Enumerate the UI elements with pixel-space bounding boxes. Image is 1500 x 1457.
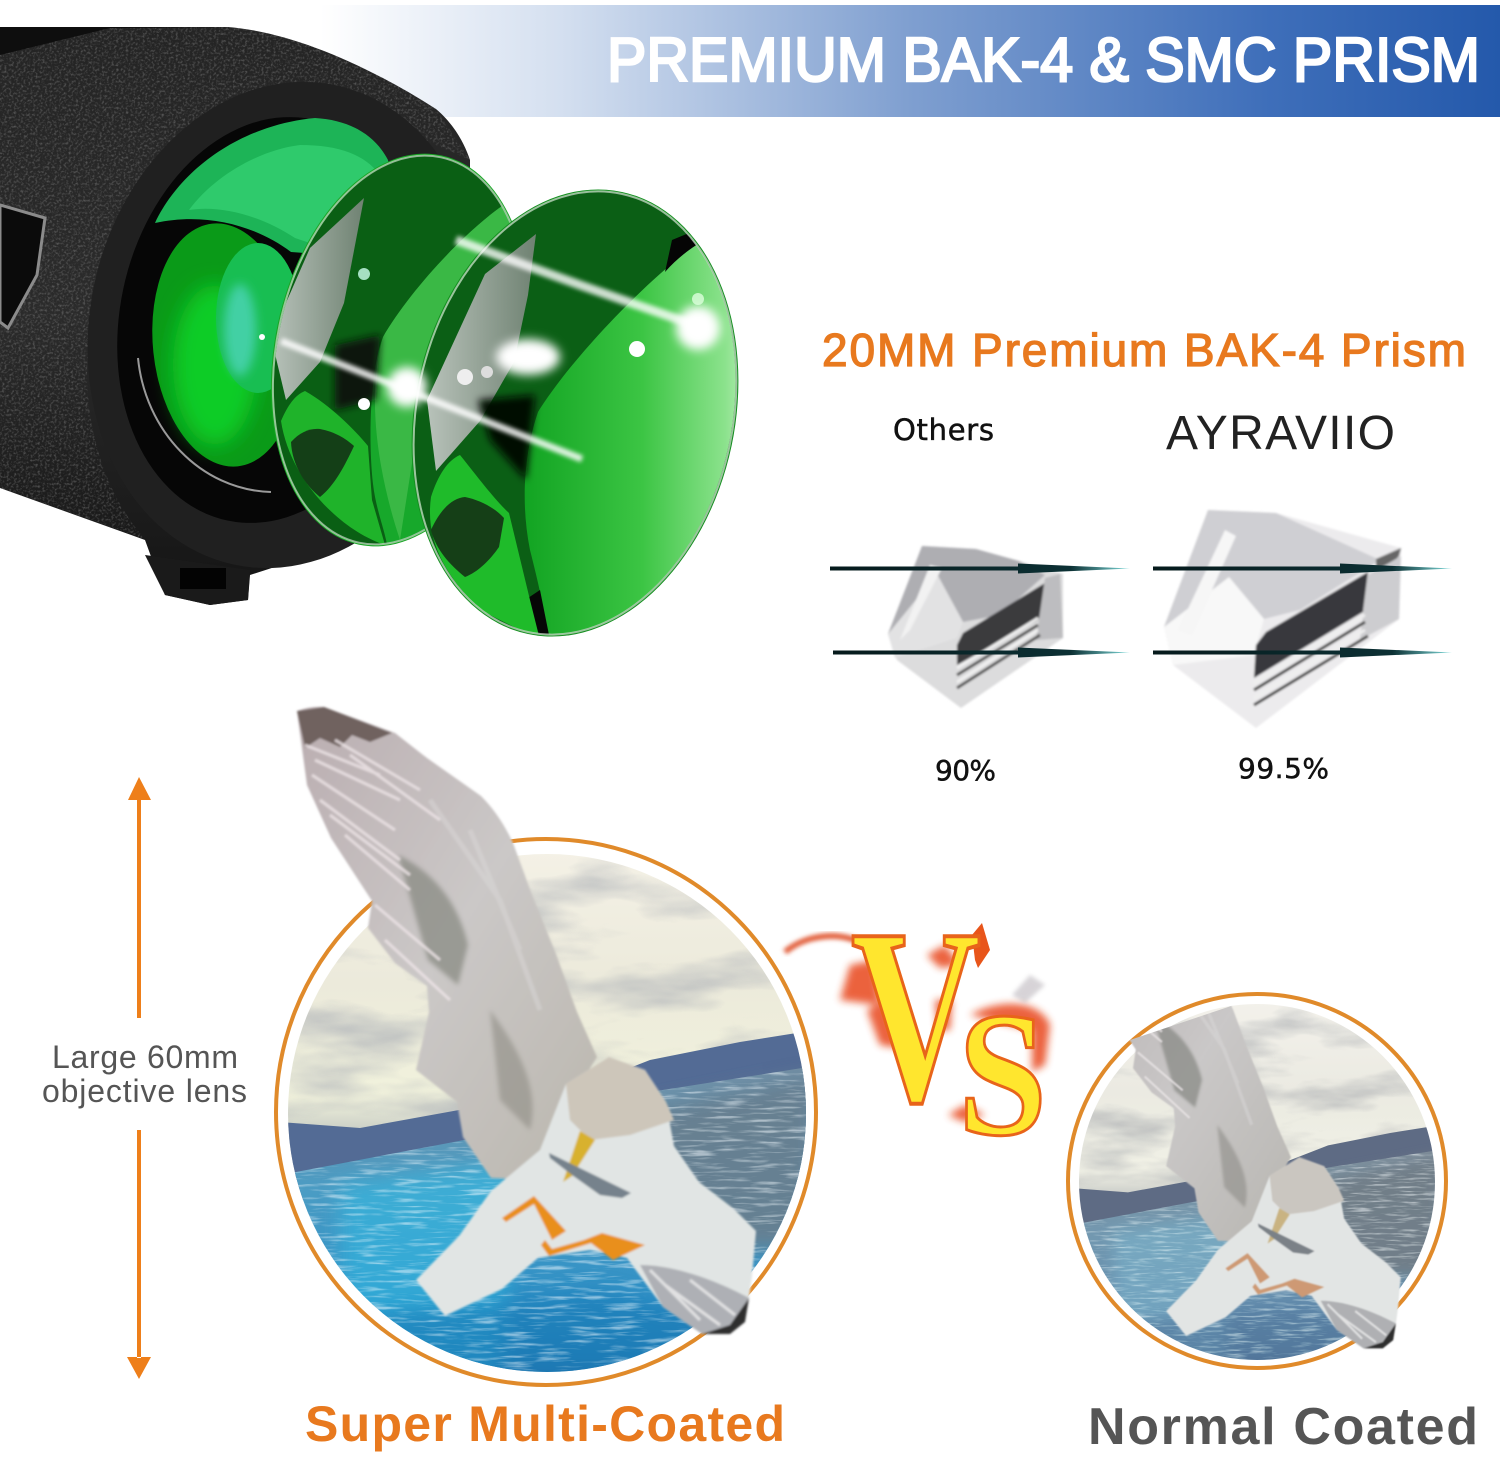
lens light flares bbox=[259, 240, 720, 459]
monocular body with front lens housing bbox=[0, 27, 470, 605]
circle: super multi-coated view bbox=[276, 707, 820, 1385]
dimension label: Large 60mm bbox=[52, 1039, 238, 1075]
prism heading: 20MM Premium BAK-4 Prism bbox=[822, 324, 1466, 376]
rear green lens bbox=[271, 154, 512, 546]
title: PREMIUM BAK-4 & SMC PRISM bbox=[607, 26, 1480, 95]
VS fire emblem: V bbox=[851, 878, 981, 1155]
mount tab bbox=[145, 555, 250, 605]
prism: AYRAVIIO bbox=[1164, 510, 1401, 728]
label: others: Others bbox=[893, 413, 994, 447]
caption: super multi-coated: Super Multi-Coated bbox=[305, 1396, 785, 1452]
VS fire emblem: S bbox=[958, 975, 1047, 1173]
seagull sharp bbox=[297, 707, 756, 1334]
shield badge bbox=[0, 205, 45, 328]
dimension label: objective lens bbox=[42, 1073, 247, 1109]
prism: others bbox=[888, 546, 1063, 708]
seagull muted bbox=[1129, 1006, 1402, 1350]
label: AYRAVIIO: AYRAVIIO bbox=[1166, 407, 1395, 460]
caption: normal coated: Normal Coated bbox=[1088, 1398, 1478, 1456]
front green lens bbox=[412, 190, 738, 636]
label: 90%: 90% bbox=[935, 754, 996, 787]
circle: normal coated view bbox=[1066, 992, 1448, 1370]
light ray arrows bbox=[830, 564, 1452, 658]
VS fire emblem bbox=[785, 878, 1050, 1173]
inner green coating bbox=[155, 118, 400, 260]
header banner bbox=[320, 5, 1500, 117]
label: 99.5%: 99.5% bbox=[1238, 752, 1329, 785]
dimension arrow bbox=[127, 777, 151, 1379]
